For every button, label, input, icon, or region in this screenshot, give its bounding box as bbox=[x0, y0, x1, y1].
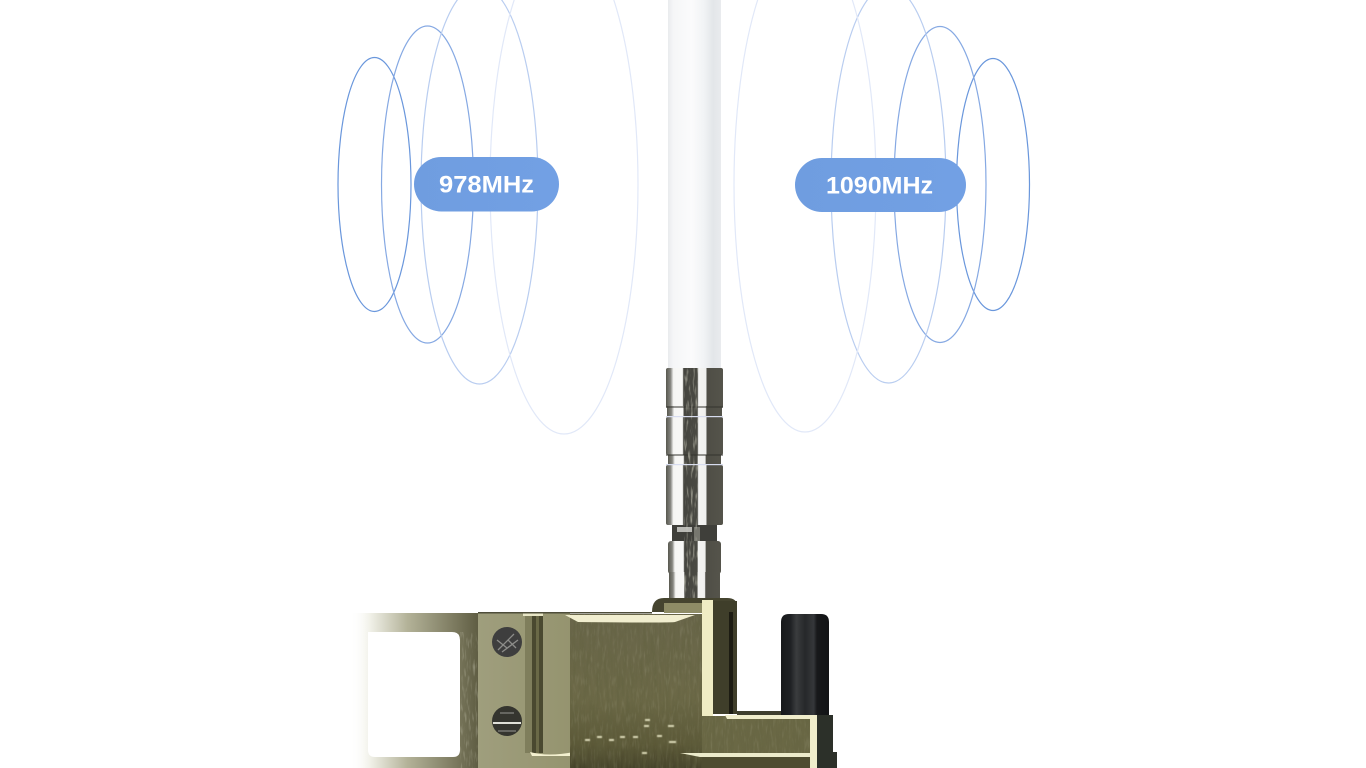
antenna whip bbox=[668, 0, 721, 368]
lower right arm bbox=[680, 711, 817, 768]
label: 1090MHz bbox=[795, 158, 966, 212]
screw: upper bbox=[492, 627, 522, 657]
mounting plate bbox=[478, 613, 570, 768]
engraved logo marks bbox=[585, 719, 676, 754]
signal waves: right group bbox=[734, 0, 1030, 432]
black post bbox=[781, 614, 837, 768]
label: 978MHz bbox=[414, 157, 559, 212]
label: 1090MHz: 1090MHz bbox=[826, 172, 933, 200]
main brushed face bbox=[478, 612, 702, 768]
signal waves: left group bbox=[338, 0, 638, 434]
left bracket with window bbox=[350, 613, 478, 768]
label: 978MHz: 978MHz bbox=[439, 172, 534, 198]
chrome connector bbox=[666, 368, 723, 599]
connector collar bbox=[652, 598, 737, 716]
vertical groove bbox=[523, 614, 574, 756]
brass mounting block bbox=[350, 598, 837, 768]
screw: lower bbox=[492, 706, 522, 736]
